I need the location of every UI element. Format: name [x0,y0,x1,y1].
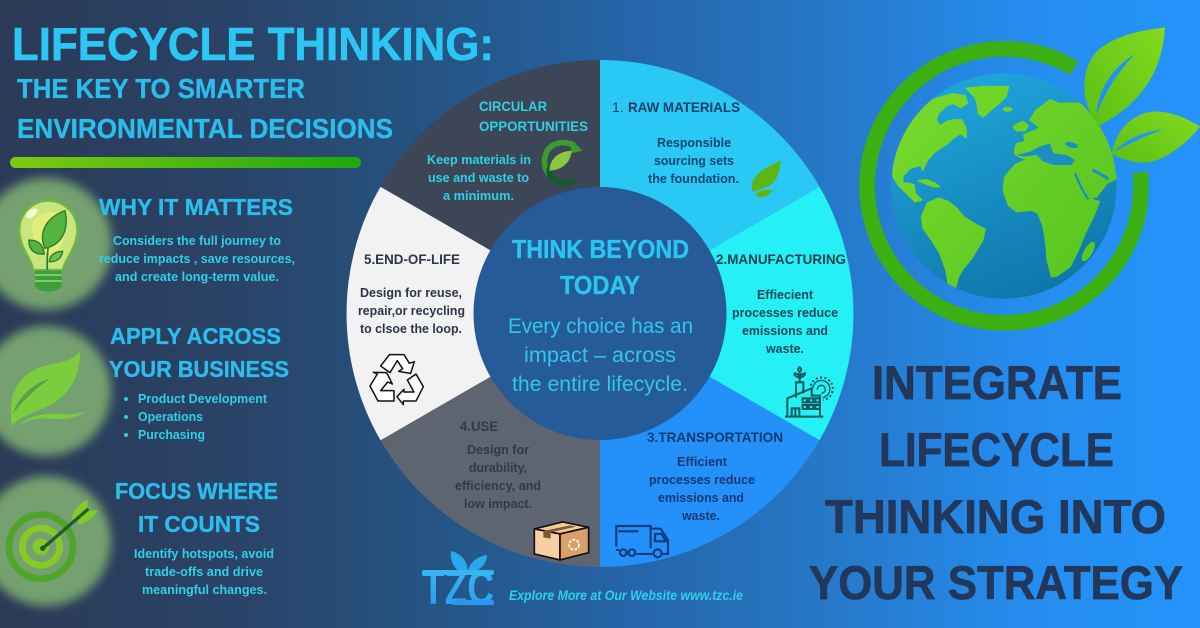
centre circle: impact – across [524,344,676,367]
segment: 3 transportation: 3.TRANSPORTATION [647,429,783,445]
segment: 4 use: 4.USE [460,418,498,434]
segment: circular opportunities: a minimum. [443,189,514,203]
segment: 4 use: durability, [469,461,527,475]
segment: 1 raw materials [600,60,820,314]
segment: 5 end of life [347,187,600,440]
segment: 4 use [380,314,600,567]
icon: target with arrow [0,476,111,606]
segment: circular opportunities: use and waste to [428,171,529,185]
call to action: LIFECYCLE [879,423,1114,476]
panel: focus where it counts [0,476,278,606]
heading: YOUR BUSINESS [109,356,289,382]
centre circle: Every choice has an [508,315,693,338]
body text: Identify hotspots, avoid [134,547,274,561]
body text: trade-offs and drive [145,565,263,579]
segment: 5 end of life: to clsoe the loop. [360,322,462,336]
segment: 3 transportation: processes reduce [649,473,755,487]
call to action: THINKING INTO [825,490,1166,543]
segment: 2 manufacturing: emissions and [742,324,828,338]
bullet list: Product Development [138,392,268,406]
heading: FOCUS WHERE [115,478,278,504]
segment: 1 raw materials: RAW MATERIALS [628,99,740,115]
segment: 3 transportation: emissions and [658,491,744,505]
icon: factory [785,367,833,417]
segment: 2 manufacturing [600,187,853,440]
big leaf [1084,27,1165,126]
segment: 3 transportation [600,314,820,567]
call to action: INTEGRATE [872,356,1122,409]
body text: Considers the full journey to [113,234,281,248]
heading: WHY IT MATTERS [99,194,293,220]
segment: 1 raw materials: sourcing sets [654,154,734,168]
segment: 1 raw materials: 1. [612,99,624,115]
globe [891,73,1120,299]
title: LIFECYCLE THINKING: [12,18,494,70]
centre circle: the entire lifecycle. [512,373,688,396]
centre circle: TODAY [560,270,640,300]
segment: 4 use: low impact. [464,497,532,511]
icon: light bulb with plant [0,178,112,310]
lifecycle wheel [347,60,853,567]
bullet list: Operations [138,410,203,424]
bullet list [124,392,268,442]
body text: reduce impacts , save resources, [99,252,295,266]
segment: circular opportunities: OPPORTUNITIES [479,118,588,134]
segment: 5 end of life: 5.END-OF-LIFE [364,251,460,267]
subtitle: ENVIRONMENTAL DECISIONS [17,113,393,144]
segment: 5 end of life: repair,or recycling [358,304,465,318]
panel: why it matters [0,178,295,310]
segment: 3 transportation: waste. [681,509,720,523]
segment: 4 use: Design for [467,443,529,457]
ring [867,49,1141,323]
footer [422,551,743,615]
segment: 2 manufacturing: 2.MANUFACTURING [716,251,846,267]
segment: 2 manufacturing: Effiecient [757,288,814,302]
icon: truck [616,526,669,557]
icon: circular leaf [544,140,583,183]
website link text: Explore More at Our Website www.tzc.ie [509,587,743,603]
centre circle: THINK BEYOND [512,234,689,264]
heading [109,323,289,382]
subtitle [17,73,393,144]
icon: leaf [752,161,781,197]
segment: 3 transportation: Efficient [677,455,728,469]
title block [10,18,494,168]
bullet list: Purchasing [138,428,205,442]
body text: meaningful changes. [142,583,267,597]
heading [115,478,278,537]
body text [134,547,274,597]
segment: circular opportunities: CIRCULAR [479,98,547,114]
panel: apply across your business [0,323,289,456]
icon: recycling arrows [370,355,423,405]
segment: 5 end of life: Design for reuse, [360,286,462,300]
segment: 1 raw materials: the foundation. [648,172,739,186]
subtitle: THE KEY TO SMARTER [17,73,305,104]
segment: circular opportunities: Keep materials in [427,153,531,167]
body text: and create long-term value. [115,270,279,284]
logo: TZC [422,551,494,615]
heading: APPLY ACROSS [110,323,281,349]
segment: 2 manufacturing: processes reduce [732,306,838,320]
green accent bar [10,157,361,168]
logo: TZC: TZC [422,562,494,615]
small leaf [1112,112,1200,163]
icon: globe with leaves [867,27,1200,323]
body text [99,234,295,284]
segment: 2 manufacturing: waste. [765,342,804,356]
call to action [809,356,1183,609]
icon: leaf [0,326,111,456]
segment: 1 raw materials: Responsible [657,136,731,150]
centre circle [474,187,726,440]
call to action: YOUR STRATEGY [809,556,1183,609]
icon: cardboard box [534,522,589,560]
segment: circular opportunities [380,60,600,314]
heading: IT COUNTS [138,511,260,537]
segment: 4 use: efficiency, and [455,479,541,493]
